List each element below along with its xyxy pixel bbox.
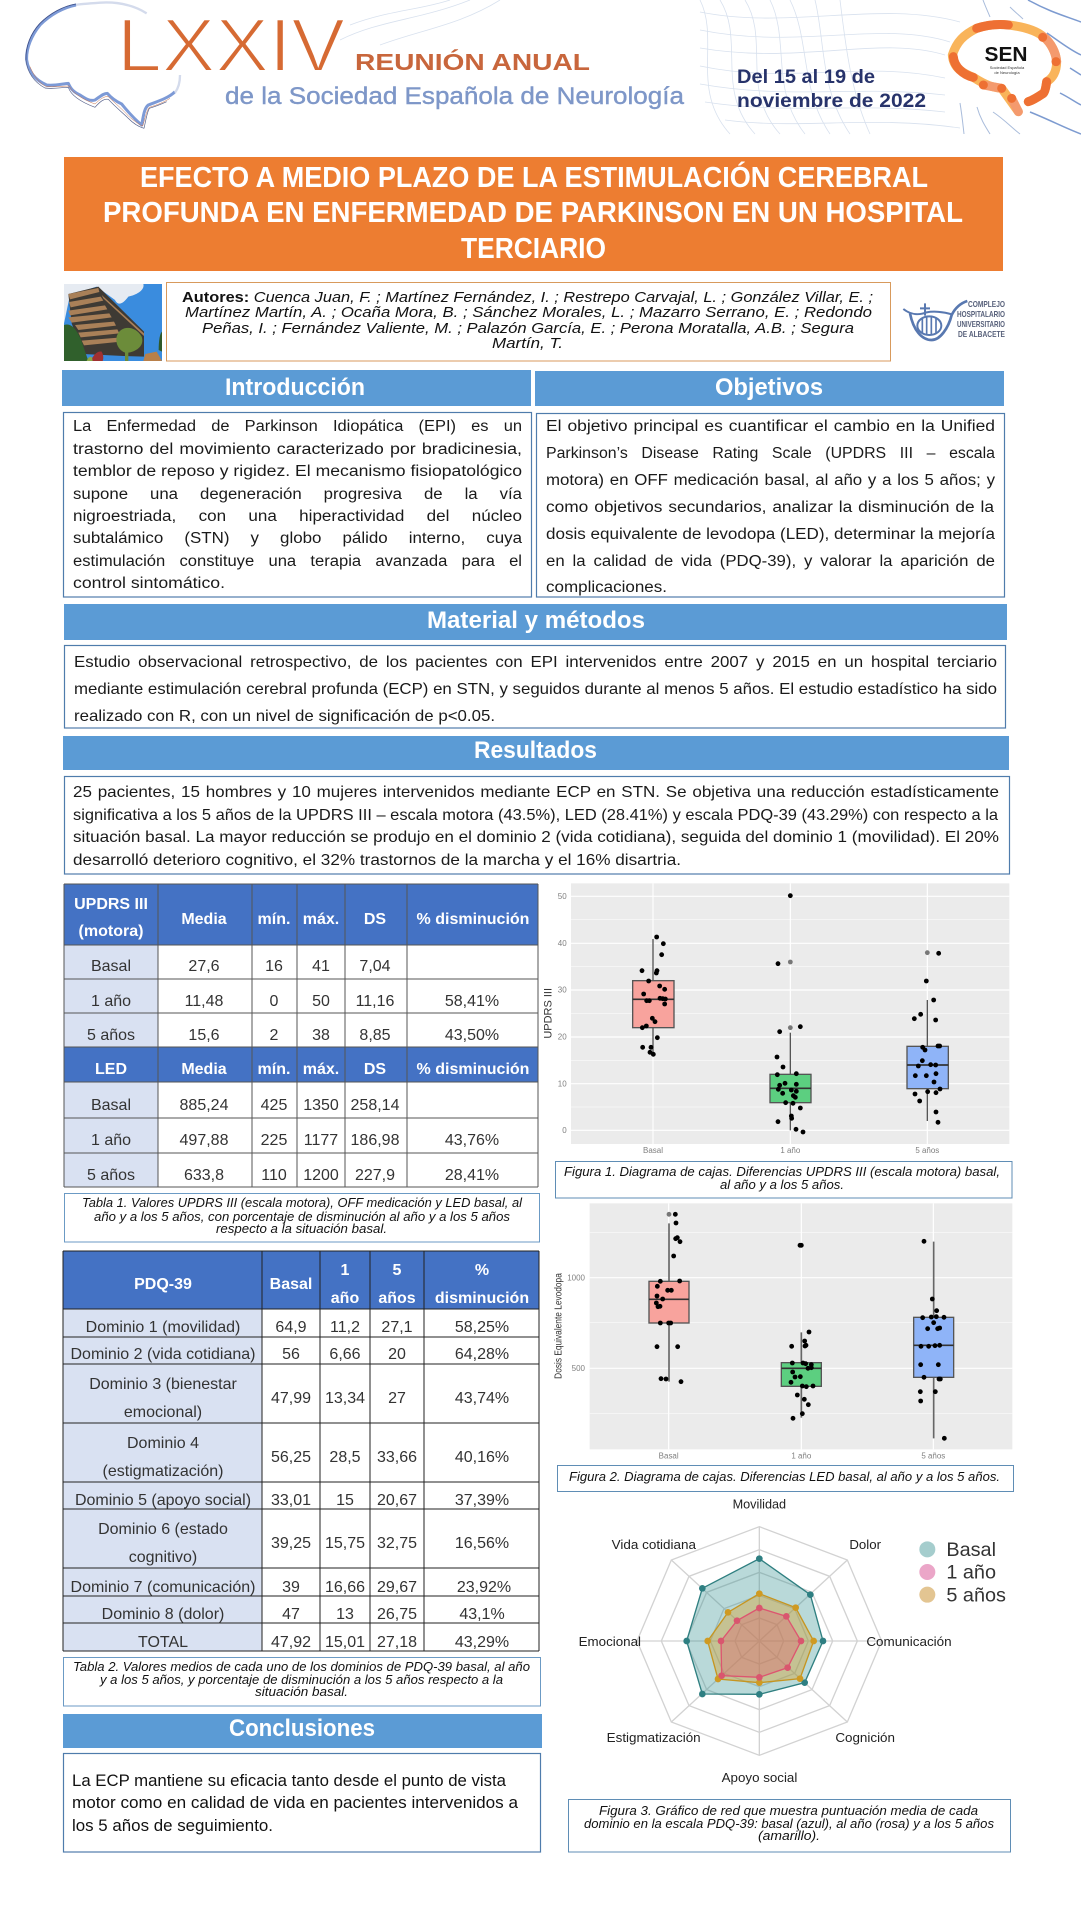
axis labels: Apoyo social <box>722 1771 797 1785</box>
table 1: UPDRS III and LED: 15,6 <box>188 1027 220 1044</box>
caption: tabla 1: Tabla 1. Valores UPDRS III (escala motora), OFF medicación y LED basal, al <box>82 1195 523 1210</box>
table 2: PDQ-39: 16,56% <box>455 1535 509 1552</box>
panel: introducción text <box>64 412 532 597</box>
y axis ticks <box>558 892 567 1135</box>
header banner <box>26 0 1081 134</box>
axis labels: Dolor <box>849 1538 881 1552</box>
table 1: UPDRS III and LED: Basal <box>91 958 131 975</box>
table 2: PDQ-39: 33,66 <box>377 1449 417 1466</box>
heading: Resultados <box>63 736 1009 770</box>
table 1: UPDRS III and LED: Basal <box>91 1097 131 1114</box>
table 2: PDQ-39: cognitivo) <box>129 1549 197 1566</box>
box: 1 año <box>781 1243 821 1421</box>
panel: introducción text: estimulación constituye una terapia avanzada para el <box>73 553 522 570</box>
SEN logo: de Neurología <box>994 70 1020 75</box>
congress number: LXXIV <box>117 3 345 87</box>
table 2: PDQ-39: 58,25% <box>455 1319 509 1336</box>
caption: tabla 1: año y a los 5 años, con porcentaje de disminución al año y a los 5 años <box>94 1209 510 1224</box>
table 1: UPDRS III and LED: 186,98 <box>351 1132 400 1149</box>
heading: Material y métodos <box>64 604 1007 640</box>
hospital photo <box>64 284 162 361</box>
panel: introducción text: control sintomático. <box>73 575 225 592</box>
heading: Objetivos <box>535 371 1004 406</box>
table 1: UPDRS III and LED: DS <box>364 911 386 928</box>
table 1: UPDRS III and LED: 225 <box>261 1132 287 1149</box>
caption: figura 3: dominio en la escala PDQ-39: basal (azul), al año (rosa) y a los 5 años <box>584 1816 994 1831</box>
congress name: REUNIÓN ANUAL <box>355 48 590 75</box>
table 1: UPDRS III and LED: 43,76% <box>445 1132 499 1149</box>
radar grid <box>637 1527 882 1755</box>
table 1: UPDRS III and LED: 425 <box>261 1097 287 1114</box>
table 1: UPDRS III and LED: 258,14 <box>351 1097 400 1114</box>
table 2: PDQ-39: disminución <box>435 1290 529 1307</box>
axis labels <box>579 1498 952 1785</box>
caption: tabla 1: respecto a la situación basal. <box>216 1221 387 1236</box>
axis labels: Emocional <box>579 1635 641 1649</box>
table 1: UPDRS III and LED: 1 año <box>91 1132 131 1149</box>
box: 5 años <box>914 1239 954 1441</box>
legend: Basal <box>946 1540 996 1561</box>
table 1: UPDRS III and LED: 28,41% <box>445 1167 499 1184</box>
table 1: UPDRS III and LED: 885,24 <box>180 1097 229 1114</box>
table 2: PDQ-39: 39,25 <box>271 1535 311 1552</box>
legend: 1 año <box>946 1563 996 1584</box>
panel: objetivos text <box>536 414 1004 597</box>
x axis labels: 5 años <box>921 1452 945 1461</box>
table 2: PDQ-39: años <box>378 1290 416 1307</box>
table 1: UPDRS III and LED: UPDRS III <box>74 896 148 913</box>
x axis labels: 1 año <box>780 1146 801 1155</box>
panel: introducción text: nigroestriada, con una hiperactividad del núcleo <box>73 508 522 525</box>
caption: figura 3: Figura 3. Gráfico de red que muestra puntuación media de cada <box>599 1803 978 1818</box>
table 1: UPDRS III and LED: máx. <box>303 1061 339 1078</box>
table 1: UPDRS III and LED: LED <box>95 1061 127 1078</box>
authors box: Autores: Cuenca Juan, F. ; Martínez Fernández, I. ; Restrepo Carvajal, L. ; González Villar, E. ; <box>182 290 873 306</box>
axis labels: Cognición <box>835 1731 895 1745</box>
heading: Introducción: Introducción <box>225 374 365 401</box>
panel: material y métodos text: realizado con R, con un nivel de significación de p<0.05. <box>74 708 495 725</box>
heading: Conclusiones: Conclusiones <box>229 1715 375 1742</box>
caption: figura 2 <box>558 1466 1014 1492</box>
chart: figura 1 box plot <box>543 883 1009 1155</box>
table 2: PDQ-39 <box>63 1251 539 1651</box>
caption: figura 1: Figura 1. Diagrama de cajas. Diferencias UPDRS III (escala motora) basal, <box>564 1164 1000 1179</box>
y axis title: UPDRS III <box>543 988 555 1039</box>
panel: material y métodos text <box>64 646 1006 728</box>
table 1: UPDRS III and LED: % disminución <box>417 1061 529 1078</box>
panel: objetivos text: El objetivo principal es cuantificar el cambio en la Unified <box>546 418 995 435</box>
authors box <box>166 282 890 361</box>
y axis ticks: 50 <box>558 892 567 901</box>
box: 5 años <box>907 950 948 1125</box>
SEN logo <box>952 24 1057 112</box>
dates: Del 15 al 19 de <box>737 67 875 88</box>
table 2: PDQ-39: 56,25 <box>271 1449 311 1466</box>
y axis ticks <box>567 1273 586 1373</box>
panel: conclusiones text: los 5 años de seguimiento. <box>72 1816 273 1835</box>
table 1: UPDRS III and LED: 8,85 <box>359 1027 391 1044</box>
panel: introducción text: La Enfermedad de Parkinson Idiopática (EPI) es un <box>73 418 522 435</box>
table 2: PDQ-39: 47 <box>282 1606 300 1623</box>
table 2: PDQ-39: 27,1 <box>381 1319 413 1336</box>
table 1: UPDRS III and LED: 2 <box>270 1027 279 1044</box>
hospital logo: HOSPITALARIO <box>957 309 1005 319</box>
x axis labels <box>643 1146 939 1155</box>
table 1: UPDRS III and LED: 5 años <box>87 1167 135 1184</box>
caption: figura 3 <box>568 1800 1010 1852</box>
panel: resultados text: desarrolló deterioro cognitivo, el 32% trastornos de la marcha y el 16% disartria. <box>73 852 681 869</box>
table 1: UPDRS III and LED: 11,48 <box>185 993 224 1010</box>
heading: Conclusiones <box>63 1714 542 1748</box>
caption: tabla 2 <box>64 1658 540 1706</box>
table 2: PDQ-39: Dominio 8 (dolor) <box>102 1606 224 1623</box>
panel: objetivos text: como objetivos secundarios, analizar la disminución de la <box>546 499 994 516</box>
table 2: PDQ-39: % <box>475 1262 489 1279</box>
authors box: Martínez Martín, A. ; Ocaña Mora, B. ; Sánchez Morales, L. ; Mazarro Serrano, E. ; Redondo <box>185 305 872 321</box>
axis labels: Vida cotidiana <box>612 1538 697 1552</box>
table 2: PDQ-39: TOTAL <box>138 1634 188 1651</box>
table 2: PDQ-39: Dominio 4 <box>127 1435 199 1452</box>
table 2: PDQ-39: 5 <box>393 1262 402 1279</box>
panel: introducción text: temblor de reposo y rigidez. El mecanismo fisiopatológico <box>73 463 522 480</box>
axis labels: Estigmatización <box>607 1731 701 1745</box>
table 2: PDQ-39: 13 <box>336 1606 354 1623</box>
title banner <box>64 157 1003 271</box>
table 2: PDQ-39: Dominio 6 (estado <box>98 1521 228 1538</box>
table 1: UPDRS III and LED: 50 <box>312 993 330 1010</box>
chart: figura 2 box plot <box>554 1203 1012 1461</box>
table 2: PDQ-39: Dominio 2 (vida cotidiana) <box>71 1346 255 1363</box>
dates <box>737 67 926 112</box>
table 2: PDQ-39: 43,29% <box>455 1634 509 1651</box>
table 2: PDQ-39: 20 <box>388 1346 406 1363</box>
table 2: PDQ-39: 13,34 <box>325 1390 365 1407</box>
table 1: UPDRS III and LED: 497,88 <box>180 1132 229 1149</box>
caption: figura 1 <box>556 1162 1012 1198</box>
y axis ticks: 30 <box>558 986 567 995</box>
panel: conclusiones text: La ECP mantiene su eficacia tanto desde el punto de vista <box>72 1771 507 1790</box>
table 2: PDQ-39: 26,75 <box>377 1606 417 1623</box>
table 1: UPDRS III and LED: % disminución <box>417 911 529 928</box>
table 2: PDQ-39: 29,67 <box>377 1579 417 1596</box>
caption: tabla 2: situación basal. <box>255 1684 348 1699</box>
table 1: UPDRS III and LED: 1200 <box>303 1167 339 1184</box>
hospital logo <box>903 299 1005 340</box>
table 2: PDQ-39: 6,66 <box>329 1346 361 1363</box>
table 2: PDQ-39: 15,75 <box>325 1535 365 1552</box>
y axis ticks: 10 <box>558 1079 567 1088</box>
table 2: PDQ-39: 37,39% <box>455 1492 509 1509</box>
panel: objetivos text: dosis equivalente de levodopa (LED), determinar la mejoría <box>546 526 995 543</box>
heading: Introducción <box>62 370 531 406</box>
hospital logo: COMPLEJO <box>968 299 1005 309</box>
brain outline logo <box>26 2 180 128</box>
table 2: PDQ-39: 47,99 <box>271 1390 311 1407</box>
table 1: UPDRS III and LED: 1177 <box>304 1132 338 1149</box>
panel: introducción text: supone una degeneración progresiva de la vía <box>73 486 522 503</box>
table 2: PDQ-39: 64,28% <box>455 1346 509 1363</box>
table 1: UPDRS III and LED: 43,50% <box>445 1027 499 1044</box>
table 2: PDQ-39: 16,66 <box>325 1579 365 1596</box>
table 2: PDQ-39: 43,74% <box>455 1390 509 1407</box>
table 2: PDQ-39: 56 <box>282 1346 300 1363</box>
panel: objetivos text: motora) en OFF medicación basal, al año y a los 5 años; y <box>546 472 995 489</box>
hospital logo: DE ALBACETE <box>958 329 1005 339</box>
table 2: PDQ-39: Basal <box>270 1276 312 1293</box>
y axis title: Dosis Equivalente Levodopa <box>554 1273 565 1379</box>
panel: introducción text: subtalámico (STN) y globo pálido interno, cuya <box>73 530 522 547</box>
box: basal <box>633 935 674 1057</box>
table 1: UPDRS III and LED: mín. <box>258 911 290 928</box>
table 2: PDQ-39: 47,92 <box>271 1634 311 1651</box>
SEN logo: Sociedad Española <box>990 65 1025 70</box>
panel: material y métodos text: Estudio observacional retrospectivo, de los pacientes con EPI intervenidos entre 2007 y 2015 en un hospital terciario <box>74 654 997 671</box>
caption: tabla 2: Tabla 2. Valores medios de cada uno de los dominios de PDQ-39 basal, al año <box>73 1659 530 1674</box>
table 1: UPDRS III and LED: 38 <box>312 1027 330 1044</box>
hospital logo: UNIVERSITARIO <box>957 319 1005 329</box>
axis labels: Comunicación <box>866 1635 952 1649</box>
table 2: PDQ-39: 27 <box>388 1390 406 1407</box>
y axis ticks: 40 <box>558 939 567 948</box>
panel: conclusiones text <box>64 1754 540 1852</box>
table 1: UPDRS III and LED: 11,16 <box>356 993 395 1010</box>
caption: tabla 1 <box>64 1194 540 1242</box>
legend: 5 años <box>946 1585 1006 1606</box>
table 1: UPDRS III and LED: Media <box>181 911 227 928</box>
table 2: PDQ-39: 1 <box>341 1262 350 1279</box>
SEN logo: SEN <box>984 44 1028 66</box>
heading: Objetivos: Objetivos <box>715 374 823 401</box>
x axis labels <box>659 1452 945 1461</box>
table 1: UPDRS III and LED: 5 años <box>87 1027 135 1044</box>
y axis ticks: 500 <box>572 1364 586 1373</box>
panel: objetivos text: en la calidad de vida (PDQ-39), y valorar la aparición de <box>546 553 995 570</box>
dates: noviembre de 2022 <box>737 91 926 112</box>
table 2: PDQ-39: 20,67 <box>377 1492 417 1509</box>
table 1: UPDRS III and LED: 16 <box>265 958 283 975</box>
title banner: EFECTO A MEDIO PLAZO DE LA ESTIMULACIÓN CEREBRAL <box>140 160 928 194</box>
table 2: PDQ-39: (estigmatización) <box>103 1463 223 1480</box>
table 2: PDQ-39: 64,9 <box>275 1319 307 1336</box>
authors box: Martín, T. <box>492 336 563 352</box>
table 1: UPDRS III and LED: mín. <box>258 1061 290 1078</box>
series: 5 años <box>704 1590 817 1686</box>
panel: material y métodos text: mediante estimulación cerebral profunda (ECP) en STN, y seguidos durante al menos 5 años. El estudio estadístico ha sido <box>74 681 997 698</box>
caption: figura 2: Figura 2. Diagrama de cajas. Diferencias LED basal, al año y a los 5 años. <box>569 1469 1000 1484</box>
table 2: PDQ-39: 39 <box>282 1579 300 1596</box>
authors box: Peñas, I. ; Fernández Valiente, M. ; Palazón García, E. ; Perona Moratalla, A.B. ; Segura <box>202 321 854 337</box>
x axis labels: 5 años <box>915 1146 939 1155</box>
series: basal <box>683 1555 826 1698</box>
table 1: UPDRS III and LED: 58,41% <box>445 993 499 1010</box>
panel: introducción text: trastorno del movimiento caracterizado por bradicinesia, <box>73 441 522 458</box>
table 1: UPDRS III and LED: 7,04 <box>359 958 391 975</box>
table 2: PDQ-39: emocional) <box>124 1404 202 1421</box>
table 1: UPDRS III and LED: 227,9 <box>355 1167 395 1184</box>
table 2: PDQ-39: 15 <box>336 1492 354 1509</box>
panel: objetivos text: Parkinson’s Disease Rating Scale (UPDRS III – escala <box>546 445 995 462</box>
heading: Resultados: Resultados <box>474 737 597 764</box>
legend <box>919 1540 1006 1606</box>
table 2: PDQ-39: 43,1% <box>459 1606 505 1623</box>
panel: resultados text <box>64 776 1010 874</box>
table 2: PDQ-39: 40,16% <box>455 1449 509 1466</box>
series: 1 año <box>718 1605 804 1681</box>
table 1: UPDRS III and LED: DS <box>364 1061 386 1078</box>
panel: resultados text: significativa a los 5 años de la UPDRS III – escala motora (43.5%), LED (28.41%) y escala PDQ-39 (43.29%) con respecto a la <box>73 807 998 824</box>
table 2: PDQ-39: año <box>331 1290 359 1307</box>
chart: figura 3 radar <box>579 1498 1006 1785</box>
table 1: UPDRS III and LED: Media <box>181 1061 227 1078</box>
y axis ticks: 20 <box>558 1033 567 1042</box>
x axis labels: Basal <box>643 1146 663 1155</box>
y axis ticks: 0 <box>562 1126 567 1135</box>
table 1: UPDRS III and LED: (motora) <box>79 923 143 940</box>
table 1: UPDRS III and LED: 1 año <box>91 993 131 1010</box>
title banner: PROFUNDA EN ENFERMEDAD DE PARKINSON EN UN HOSPITAL <box>103 197 963 229</box>
caption: figura 1: al año y a los 5 años. <box>720 1177 844 1192</box>
table 1: UPDRS III and LED: 0 <box>270 993 279 1010</box>
panel: resultados text: situación basal. La mayor reducción se produjo en el dominio 2 (vida cotidiana), seguida del dominio 1 (movilidad). El 20% <box>73 829 999 846</box>
caption: figura 3: (amarillo). <box>758 1828 820 1843</box>
table 2: PDQ-39: 32,75 <box>377 1535 417 1552</box>
table 2: PDQ-39: Dominio 1 (movilidad) <box>86 1319 240 1336</box>
heading: Material y métodos: Material y métodos <box>427 607 645 634</box>
table 2: PDQ-39: 23,92% <box>457 1579 511 1596</box>
x axis labels: 1 año <box>791 1452 812 1461</box>
table 2: PDQ-39: 27,18 <box>377 1634 417 1651</box>
table 1: UPDRS III and LED: 41 <box>312 958 330 975</box>
table 1: UPDRS III and LED: máx. <box>303 911 339 928</box>
x axis labels: Basal <box>659 1452 679 1461</box>
table 2: PDQ-39: Dominio 5 (apoyo social) <box>75 1492 251 1509</box>
table 1: UPDRS III and LED: 633,8 <box>184 1167 224 1184</box>
society name: de la Sociedad Española de Neurología <box>225 83 685 110</box>
table 1: UPDRS III and LED <box>64 884 538 1187</box>
caption: tabla 2: y a los 5 años, y porcentaje de disminución a los 5 años respecto a la <box>99 1672 503 1687</box>
table 2: PDQ-39: Dominio 3 (bienestar <box>89 1376 237 1393</box>
table 2: PDQ-39: 28,5 <box>329 1449 361 1466</box>
panel: conclusiones text: motor como en calidad de vida en pacientes intervenidos a <box>72 1793 519 1812</box>
table 1: UPDRS III and LED: 27,6 <box>188 958 220 975</box>
box: 1 año <box>770 893 811 1134</box>
panel: resultados text: 25 pacientes, 15 hombres y 10 mujeres intervenidos mediante ECP en STN. Se objetiva una reducción estadísticamente <box>73 784 999 801</box>
table 2: PDQ-39: 11,2 <box>330 1319 360 1336</box>
table 2: PDQ-39: Dominio 7 (comunicación) <box>71 1579 255 1596</box>
table 1: UPDRS III and LED: 1350 <box>303 1097 339 1114</box>
table 2: PDQ-39: PDQ-39 <box>134 1276 192 1293</box>
axis labels: Movilidad <box>733 1498 786 1512</box>
title banner: TERCIARIO <box>461 233 606 265</box>
table 2: PDQ-39: 33,01 <box>271 1492 311 1509</box>
y axis ticks: 1000 <box>567 1273 586 1282</box>
table 2: PDQ-39: 15,01 <box>325 1634 365 1651</box>
box: basal <box>649 1212 689 1384</box>
panel: objetivos text: complicaciones. <box>546 579 667 596</box>
table 1: UPDRS III and LED: 110 <box>261 1167 287 1184</box>
